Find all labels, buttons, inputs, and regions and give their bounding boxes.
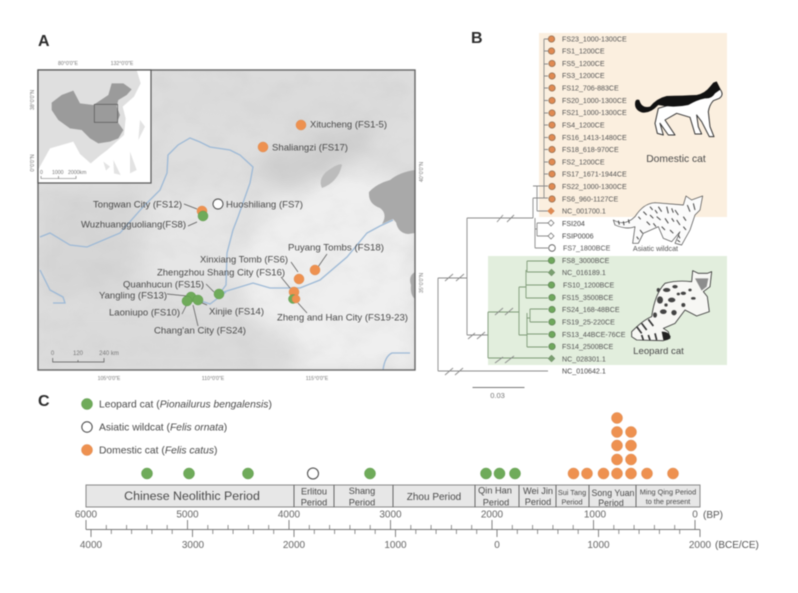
label: Asiatic wildcat: Asiatic wildcat — [633, 244, 678, 253]
BCE/CE scale labels: (BCE/CE) — [715, 540, 759, 551]
period bar: Ming Qing Period — [640, 488, 696, 496]
period bar: Qin Han — [478, 486, 512, 496]
label: Leopard cat: Leopard cat — [633, 346, 684, 357]
icon: domestic cat — [635, 81, 722, 137]
panel label B: B — [471, 30, 483, 47]
sample dots — [142, 412, 678, 479]
domestic cat labels: FS5_1200CE — [562, 60, 605, 68]
BP scale labels: 3000 — [379, 510, 402, 520]
site labels: Tongwan City (FS12) — [93, 200, 182, 210]
period bar: Zhou Period — [407, 492, 461, 503]
inset scale bar — [40, 170, 86, 178]
site labels: Quanhucun (FS15) — [123, 280, 204, 290]
BP scale labels: 4000 — [278, 510, 301, 520]
map graticule labels: 132°0'0"E — [111, 61, 134, 67]
site labels: Shaliangzi (FS17) — [272, 142, 348, 154]
site labels: Xitucheng (FS1-5) — [310, 120, 387, 130]
map graticule labels: 35°0'0"N — [419, 273, 425, 293]
period bar: Chinese Neolithic Period — [124, 489, 260, 503]
BCE/CE scale labels: 1000 — [384, 540, 407, 551]
period bar: Period — [301, 498, 327, 508]
site labels: Zheng and Han City (FS19-23) — [277, 312, 408, 324]
BP scale labels: 5000 — [176, 510, 199, 520]
leopard cat labels: FS8_3000BCE — [562, 257, 610, 265]
inset scale bar: 0 — [40, 170, 43, 176]
leopard cat labels: FS15_3500BCE — [562, 294, 614, 302]
outgroup label: NC_010642.1 — [562, 368, 606, 376]
leopard cat labels: FS24_168-48BCE — [562, 306, 620, 314]
BP scale labels: (BP) — [703, 510, 723, 521]
site labels: Huoshiliang (FS7) — [226, 200, 303, 210]
legend: Leopard cat (Pionailurus bengalensis) — [99, 400, 272, 410]
icon: leopard cat — [632, 271, 712, 341]
period bar: Wei Jin — [523, 486, 553, 496]
terrain relief background — [38, 70, 415, 370]
panel label C: C — [38, 393, 50, 410]
rivers — [40, 138, 410, 370]
map graticule labels: 115°0'0"E — [306, 376, 329, 382]
period bar: Period — [349, 498, 375, 508]
asiatic wildcat tips and labels — [548, 220, 611, 252]
asiatic wildcat tips and labels: FS7_1800BCE — [563, 244, 611, 252]
branch break marks — [445, 215, 514, 375]
map graticule labels: 80°0'0"E — [58, 61, 78, 67]
site labels: Chang'an City (FS24) — [154, 326, 246, 336]
leader lines — [167, 204, 327, 326]
domestic cat tips — [548, 36, 555, 214]
site labels: Xinjie (FS14) — [209, 306, 264, 318]
domestic cat labels: FS6_960-1127CE — [562, 196, 619, 204]
domestic cat labels: FS20_1000-1300CE — [562, 97, 627, 105]
domestic cat labels: FS1_1200CE — [562, 48, 605, 56]
leopard cat labels: NC_028301.1 — [562, 356, 606, 364]
BP scale labels: 0 — [692, 510, 698, 520]
domestic cat labels: FS16_1413-1480CE — [562, 134, 627, 142]
period bar: Song Yuan — [592, 488, 635, 498]
map graticule labels: 38°0'0"N — [30, 90, 36, 110]
label: Domestic cat: Domestic cat — [646, 154, 706, 165]
leopard cat tips — [548, 257, 555, 362]
site labels: Zhengzhou Shang City (FS16) — [157, 268, 285, 278]
panel: map of sites — [30, 61, 425, 382]
map graticule labels — [30, 61, 425, 382]
map scale bar: 240 km — [99, 351, 119, 357]
BP scale labels: 6000 — [75, 510, 98, 520]
leopard cat labels — [562, 257, 626, 364]
domestic cat labels: FS3_1200CE — [562, 72, 605, 80]
domestic cat labels: FS2_1200CE — [562, 158, 605, 166]
BCE/CE scale labels — [80, 540, 759, 551]
inset scale bar: 2000km — [68, 170, 86, 176]
period bar: Erlitou — [301, 486, 327, 496]
period bar: Period — [483, 498, 509, 508]
asiatic wildcat tips and labels: FSIP0006 — [562, 232, 594, 240]
site labels: Laoniupo (FS10) — [109, 308, 180, 318]
map scale bar: 120 — [73, 351, 84, 357]
period bar: Period — [561, 498, 583, 506]
BP scale labels — [75, 510, 723, 521]
period bar: Sui Tang — [558, 488, 586, 497]
domestic cat labels: FS17_1671-1944CE — [562, 170, 627, 178]
map scale bar — [51, 351, 119, 362]
panel label A: A — [38, 33, 50, 50]
legend: Domestic cat (Felis catus) — [99, 446, 217, 456]
BCE/CE scale labels: 3000 — [182, 540, 205, 551]
domestic cat labels: FS22_1000-1300CE — [562, 183, 627, 191]
site labels: Wuzhuangguoliang(FS8) — [81, 220, 186, 230]
site labels: Yangling (FS13) — [99, 290, 167, 302]
China land area — [52, 83, 132, 143]
time axes — [75, 510, 759, 551]
domestic cat labels: FS12_706-883CE — [562, 84, 619, 92]
legend: Asiatic wildcat (Felis ornata) — [99, 422, 227, 434]
BCE/CE scale labels: 4000 — [80, 540, 103, 551]
leopard cat labels: FS14_2500BCE — [562, 343, 614, 351]
map graticule labels: 105°0'0"E — [98, 376, 121, 382]
period bar: Period — [598, 498, 624, 508]
domestic cat labels: FS21_1000-1300CE — [562, 109, 627, 117]
leopard cat labels: FS19_25-220CE — [562, 318, 615, 326]
BCE/CE scale labels: 2000 — [689, 540, 712, 551]
site markers — [182, 120, 320, 306]
leopard cat labels: FS10_1200BCE — [563, 282, 615, 290]
domestic cat clade background — [539, 33, 727, 217]
period bar: Shang — [349, 486, 375, 496]
period bar: Period — [525, 497, 551, 507]
site labels: Xinxiang Tomb (FS6) — [200, 254, 288, 266]
domestic cat labels: NC_001700.1 — [562, 208, 606, 216]
site labels — [81, 120, 408, 336]
tree branches — [438, 39, 548, 371]
map scale bar: 0 — [51, 351, 55, 357]
panel: phylogenetic tree — [438, 33, 727, 400]
inset scale bar: 1000 — [52, 170, 64, 176]
leopard cat clade background — [488, 256, 727, 365]
period bar — [86, 485, 700, 508]
legend — [82, 398, 272, 456]
tree scale bar — [472, 388, 524, 400]
BP scale labels: 1000 — [584, 510, 607, 520]
leopard cat labels: NC_016189.1 — [562, 269, 606, 277]
BCE/CE scale labels: 0 — [494, 540, 500, 551]
domestic cat labels: FS23_1000-1300CE — [562, 36, 627, 44]
map graticule labels: 110°0'0"E — [202, 376, 225, 382]
BP scale labels: 2000 — [481, 510, 504, 520]
tree scale bar: 0.03 — [490, 391, 505, 400]
domestic cat labels — [562, 36, 627, 216]
leopard cat labels: FS13_44BCE-76CE — [562, 331, 626, 339]
asiatic wildcat tips and labels: FSI204 — [562, 220, 585, 228]
map graticule labels: 40°0'0"N — [419, 162, 425, 182]
domestic cat labels: FS4_1200CE — [562, 122, 605, 130]
domestic cat labels: FS18_618-970CE — [562, 146, 619, 154]
site labels: Puyang Tombs (FS18) — [288, 242, 384, 254]
map frame — [38, 70, 415, 370]
panel: timeline — [75, 398, 759, 551]
BCE/CE scale labels: 1000 — [587, 540, 610, 551]
map graticule labels: 0°0'0"N — [30, 154, 36, 172]
icon: asiatic wildcat — [613, 196, 703, 245]
BCE/CE scale labels: 2000 — [283, 540, 306, 551]
period bar: to the present — [646, 497, 690, 506]
inset map of China — [38, 70, 151, 183]
